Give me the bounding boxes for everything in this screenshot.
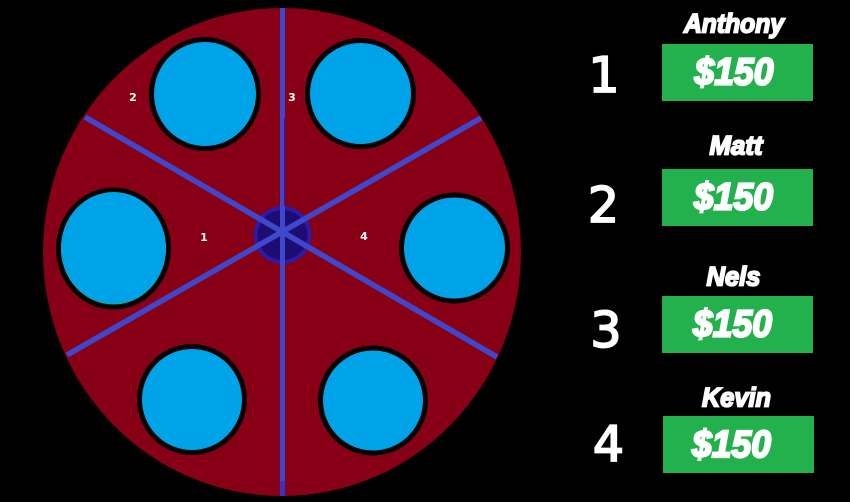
player 4	[593, 382, 814, 473]
rank 3: 3	[590, 302, 622, 359]
score box 4: $150	[691, 424, 771, 466]
player 1	[588, 8, 813, 104]
pocket: left	[58, 190, 168, 307]
score box 3: $150	[692, 304, 772, 346]
name: Kevin: Kevin	[702, 382, 771, 412]
wheel label 1: 1	[200, 231, 208, 244]
score box 2: $150	[693, 176, 773, 218]
name: Anthony: Anthony	[683, 8, 786, 38]
pocket: top left	[152, 40, 258, 148]
wheel disc	[43, 8, 521, 496]
score box 1: $150	[694, 52, 774, 94]
rank 1: 1	[588, 47, 620, 104]
score box 2	[662, 169, 813, 226]
name: Matt: Matt	[710, 130, 763, 160]
score box 4	[663, 416, 814, 473]
score box 3	[662, 296, 813, 353]
score box 1	[662, 44, 813, 101]
player 2	[588, 130, 813, 234]
wheel hub	[254, 206, 312, 264]
wheel label 3: 3	[288, 91, 296, 104]
wheel label 4: 4	[360, 230, 368, 243]
pocket: top right	[308, 40, 414, 146]
rank 2: 2	[588, 177, 619, 234]
name: Nels: Nels	[706, 262, 760, 292]
player 3	[590, 262, 813, 359]
rank 4: 4	[593, 416, 624, 473]
wheel label 2: 2	[129, 91, 137, 104]
pocket: right	[402, 195, 508, 301]
wheel spokes	[67, 8, 497, 496]
scoreboard	[588, 8, 814, 473]
pocket: bottom right	[320, 348, 426, 453]
wheel	[43, 8, 521, 496]
pocket: bottom left	[140, 346, 244, 452]
